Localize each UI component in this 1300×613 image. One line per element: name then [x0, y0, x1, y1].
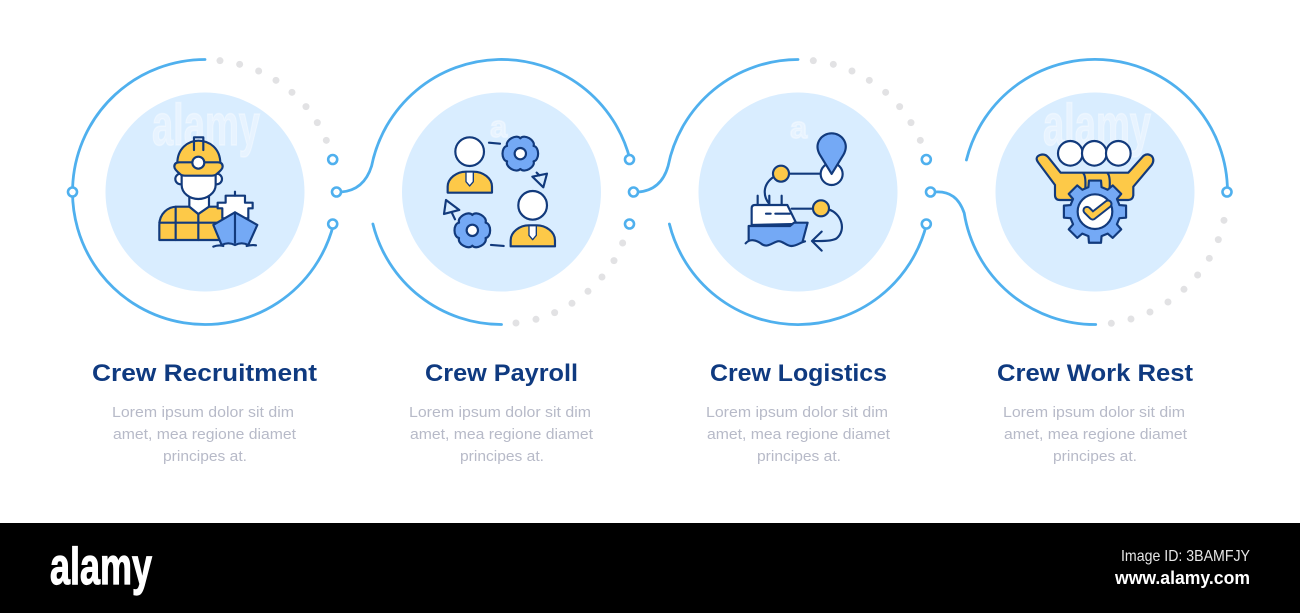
website: www.alamy.com [1114, 568, 1250, 588]
icon: worker and ship [159, 137, 257, 247]
ring arc [73, 60, 334, 324]
watermark: a [790, 110, 808, 145]
connector nodes [926, 188, 1232, 196]
ring arcs [341, 59, 630, 325]
watermark: alamy [152, 93, 260, 158]
description: Lorem ipsum dolor sit dim [112, 404, 294, 421]
image id: Image ID: 3BAMFJY [1121, 548, 1250, 565]
description: amet, mea regione diamet [113, 426, 297, 443]
description: amet, mea regione diamet [707, 426, 891, 443]
heading: Crew Recruitment [92, 360, 317, 387]
description: Lorem ipsum dolor sit dim [706, 404, 888, 421]
description: principes at. [757, 448, 841, 465]
watermark: alamy [1043, 93, 1151, 158]
dotted arc [512, 239, 626, 326]
dotted arc [1108, 217, 1227, 327]
heading: Crew Work Rest [997, 360, 1193, 387]
background disc [106, 92, 304, 292]
icon: team hands and gear check [1037, 141, 1153, 243]
description [706, 404, 891, 465]
description: amet, mea regione diamet [1004, 426, 1188, 443]
icon: people and gears cycle [444, 137, 555, 247]
description [112, 404, 297, 465]
icon: ship route and pin [746, 133, 846, 251]
description: principes at. [460, 448, 544, 465]
background disc [996, 92, 1194, 292]
description: amet, mea regione diamet [410, 426, 594, 443]
connector nodes [629, 155, 931, 228]
description [1003, 404, 1188, 465]
panel: crew logistics [629, 57, 931, 465]
ring arcs [935, 59, 1228, 325]
footer band [0, 523, 1300, 613]
description: principes at. [163, 448, 247, 465]
panel: crew work rest [926, 59, 1232, 465]
panel: crew payroll [332, 59, 634, 465]
description: principes at. [1053, 448, 1137, 465]
heading: Crew Payroll [425, 360, 578, 387]
description: Lorem ipsum dolor sit dim [1003, 404, 1185, 421]
background disc [402, 92, 601, 292]
footer logo: alamy [50, 538, 152, 596]
heading: Crew Logistics [710, 360, 887, 387]
dotted arc [216, 57, 330, 144]
panel: crew recruitment [68, 57, 337, 465]
connector nodes [68, 155, 337, 228]
connector nodes [332, 155, 634, 228]
watermark: a [490, 109, 508, 144]
dotted arc [810, 57, 924, 144]
ring arcs [638, 60, 927, 325]
description: Lorem ipsum dolor sit dim [409, 404, 591, 421]
description [409, 404, 594, 465]
background disc [698, 92, 898, 292]
